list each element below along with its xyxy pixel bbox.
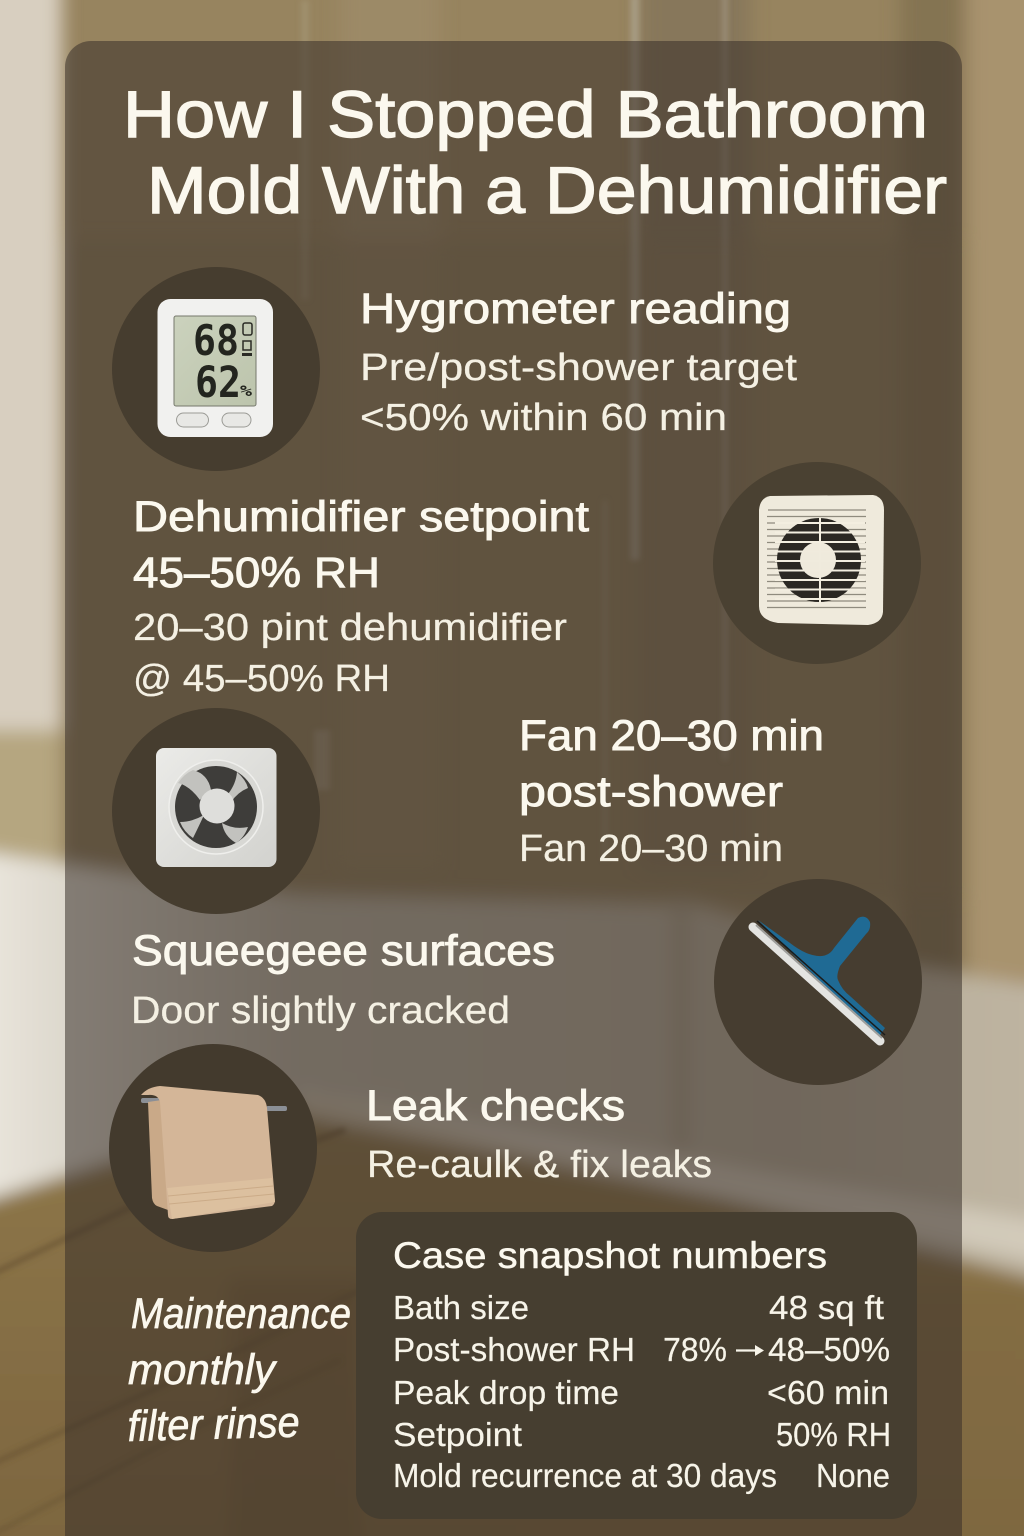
- icon: exhaust fan: [112, 708, 320, 914]
- row: bath size: [393, 1289, 884, 1326]
- text block: leak checks: Leak checks: [366, 1082, 625, 1130]
- text block: fan timing: Fan 20–30 min: [519, 828, 783, 870]
- icon: towel on rail: [109, 1044, 317, 1252]
- text block: squeegee surfaces: [131, 927, 555, 1032]
- text block: fan timing: [519, 712, 824, 870]
- text block: hygrometer reading: Hygrometer reading: [360, 285, 791, 333]
- panel: case snapshot numbers: [356, 1212, 917, 1519]
- icon: hygrometer: %: [240, 382, 252, 400]
- text block: fan timing: post-shower: [519, 768, 783, 816]
- text block: hygrometer reading: Pre/post-shower target: [360, 347, 797, 389]
- icon: hygrometer: [112, 267, 320, 471]
- text block: fan timing: Fan 20–30 min: [519, 712, 824, 760]
- row: mold recurrence: Mold recurrence at 30 days: [393, 1457, 777, 1494]
- text block: maintenance note: filter rinse: [127, 1399, 300, 1451]
- text block: squeegee surfaces: Squeegeee surfaces: [132, 927, 555, 975]
- row: post-shower RH: [393, 1331, 890, 1368]
- row: bath size: Bath size: [393, 1289, 529, 1326]
- row: setpoint: [393, 1416, 891, 1453]
- text block: dehumidifier setpoint: Dehumidifier setpoint: [133, 493, 589, 541]
- text block: maintenance note: monthly: [128, 1346, 277, 1394]
- icon: squeegee: [714, 879, 922, 1085]
- text block: leak checks: [366, 1082, 712, 1186]
- case snapshot heading: Case snapshot numbers: [393, 1235, 827, 1276]
- text block: maintenance note: [127, 1290, 351, 1451]
- row: mold recurrence: None: [816, 1457, 890, 1494]
- row: peak drop time: <60 min: [767, 1374, 889, 1411]
- title: Mold With a Dehumidifier: [147, 153, 947, 227]
- title: [123, 77, 947, 227]
- text block: leak checks: Re-caulk & fix leaks: [367, 1144, 712, 1186]
- row: setpoint: 50% RH: [776, 1416, 891, 1453]
- text block: hygrometer reading: <50% within 60 min: [360, 397, 727, 439]
- row: post-shower RH: 78%: [663, 1331, 727, 1368]
- icon: hygrometer: 68: [193, 316, 239, 365]
- icon: wall vent grille: [713, 462, 921, 664]
- row: peak drop time: [393, 1374, 889, 1411]
- row: setpoint: Setpoint: [393, 1416, 522, 1453]
- text block: dehumidifier setpoint: 45–50% RH: [133, 549, 380, 597]
- text block: hygrometer reading: [360, 285, 797, 439]
- row: post-shower RH: 48–50%: [768, 1331, 890, 1368]
- text block: dehumidifier setpoint: @ 45–50% RH: [133, 658, 390, 700]
- text block: squeegee surfaces: Door slightly cracked: [131, 990, 510, 1032]
- row: peak drop time: Peak drop time: [393, 1374, 619, 1411]
- title: How I Stopped Bathroom: [123, 77, 928, 151]
- text block: dehumidifier setpoint: [133, 493, 589, 700]
- text block: dehumidifier setpoint: 20–30 pint dehumidifier: [133, 607, 567, 649]
- row: bath size: 48 sq ft: [769, 1289, 884, 1326]
- row: post-shower RH: Post-shower RH: [393, 1331, 635, 1368]
- icon: hygrometer: 62: [195, 358, 241, 408]
- text block: maintenance note: Maintenance: [131, 1290, 351, 1338]
